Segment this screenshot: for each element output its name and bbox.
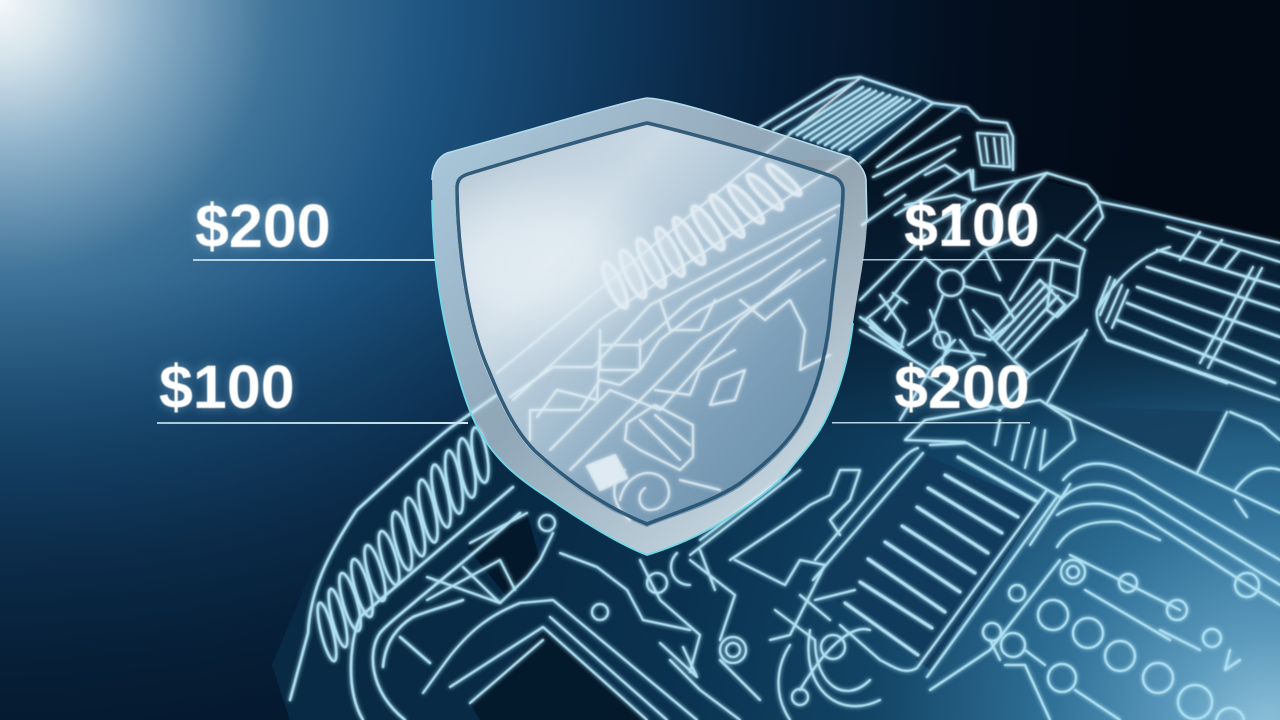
long belt edges seen through shield — [497, 78, 860, 400]
callout: right lower $200: $200 — [894, 353, 1030, 421]
lower right ducts and vents — [813, 400, 1280, 720]
callout: left upper $200: $200 — [195, 192, 331, 260]
ribbed housing, top — [760, 77, 1103, 240]
lower centre fittings — [423, 470, 880, 720]
engine silhouette — [272, 75, 1280, 720]
ribbed belt seen through shield — [598, 162, 804, 311]
shield dark inner edge — [457, 123, 843, 524]
cylinder — [1097, 202, 1280, 400]
shield top edge highlight — [432, 98, 867, 223]
shield cyan outer edge — [432, 200, 853, 555]
engine blueprint line work — [290, 77, 1280, 720]
shield rim — [432, 98, 867, 555]
ribbed belt, lower left — [290, 395, 520, 720]
shield glass fill — [455, 122, 845, 527]
callout: left lower $100: $100 — [159, 353, 295, 421]
engine upper dark shading — [780, 105, 1280, 440]
right side linkage and hub — [860, 195, 1100, 420]
mechanism seen through shield — [510, 205, 840, 520]
shield glass highlight — [420, 190, 640, 330]
engine dark cavities — [467, 405, 1227, 720]
callout: right upper $100: $100 — [904, 191, 1040, 259]
